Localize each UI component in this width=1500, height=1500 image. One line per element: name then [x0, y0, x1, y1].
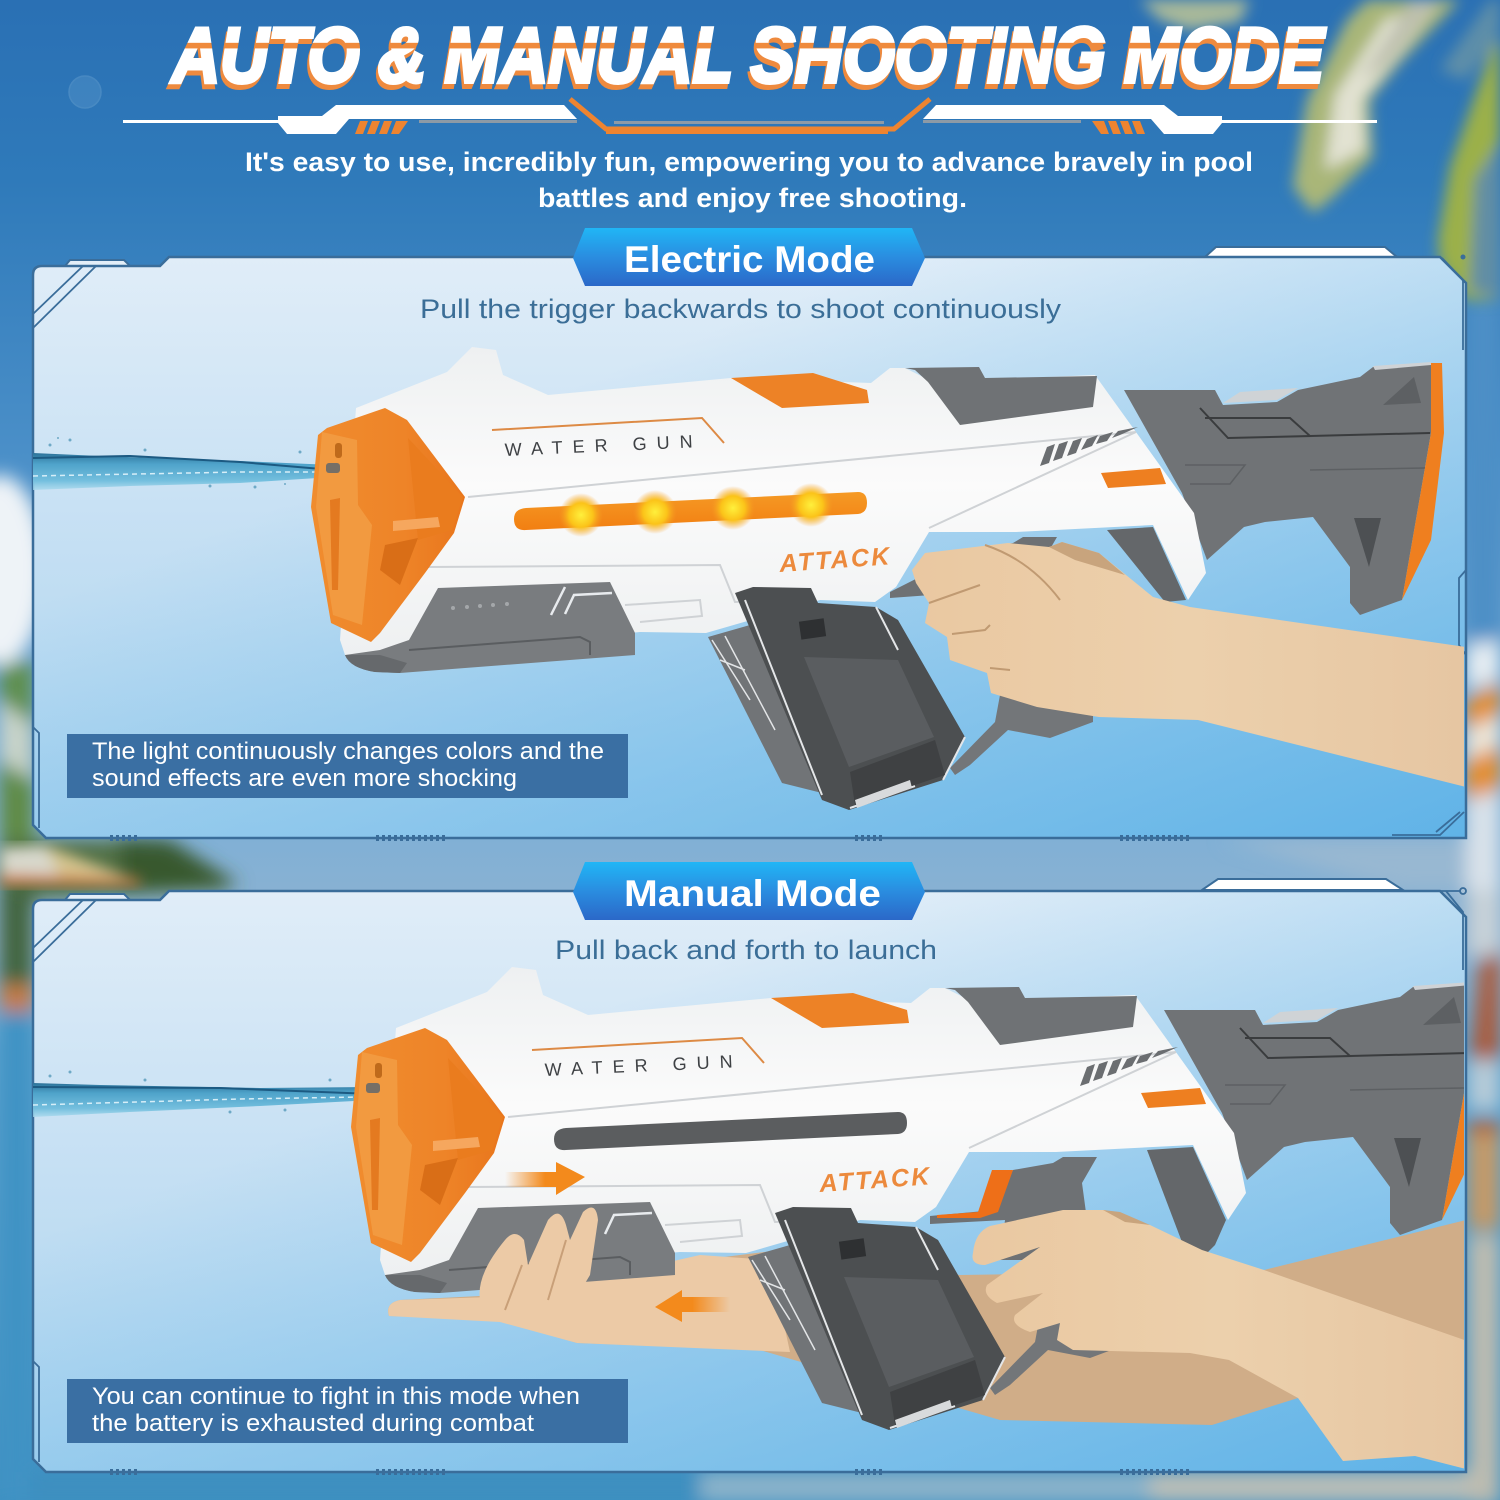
gun top rail — [905, 367, 1097, 425]
panel: electric mode — [33, 228, 1466, 838]
motion arrow: back — [655, 1290, 730, 1322]
gun body — [340, 347, 1206, 655]
caption: electric mode: The light continuously changes colors and the — [92, 738, 604, 765]
gun top cover — [771, 993, 909, 1028]
gun muzzle — [351, 1028, 505, 1262]
gun orange vent — [1101, 468, 1166, 488]
front hand fingers on slide — [480, 1208, 598, 1325]
gun orange vent — [1141, 1088, 1206, 1108]
gun label: water gun: WATER GUN — [504, 431, 693, 460]
rear forearm — [388, 1219, 1470, 1425]
subtitle: It's easy to use, incredibly fun, empowering you to advance bravely in pool — [245, 147, 1253, 177]
gun rear strut — [890, 527, 1186, 775]
gun vents — [1080, 1047, 1178, 1086]
gun label: attack: ATTACK — [777, 542, 892, 578]
heading badge: manual mode: Manual Mode — [624, 873, 881, 914]
caption: manual mode: You can continue to fight in this mode when — [92, 1383, 580, 1410]
gun body — [380, 967, 1246, 1275]
gun label: water gun — [492, 418, 724, 460]
gun stock — [1164, 982, 1484, 1235]
icon: water droplet bubble — [69, 76, 101, 108]
caption: manual mode: the battery is exhausted during combat — [92, 1410, 534, 1437]
subtitle — [245, 147, 1253, 213]
gun lower cover — [385, 1202, 675, 1293]
gun magazine — [708, 587, 965, 810]
title: AUTO & MANUAL SHOOTING MODE — [170, 11, 1326, 99]
beach umbrella — [0, 845, 140, 886]
gun stock — [1124, 362, 1444, 615]
heading badge: electric mode — [573, 228, 925, 286]
panel frame — [33, 247, 1466, 838]
gun label: water gun: WATER GUN — [544, 1051, 733, 1080]
palm fronds — [1140, 0, 1500, 300]
gun LED strip — [514, 483, 867, 537]
instruction text: Pull back and forth to launch — [555, 935, 937, 965]
caption: electric mode: sound effects are even more shocking — [92, 765, 517, 792]
water gun — [351, 967, 1484, 1430]
water jet — [33, 437, 333, 490]
title decorative divider — [123, 99, 1377, 134]
gun top cover — [731, 373, 869, 408]
subtitle: battles and enjoy free shooting. — [538, 183, 967, 213]
gun body seams — [428, 432, 1136, 622]
gun vents — [1040, 427, 1138, 466]
gun top rail — [945, 987, 1137, 1045]
gun muzzle — [311, 408, 465, 642]
motion arrow: forward — [505, 1162, 585, 1195]
heading badge: manual mode — [573, 862, 925, 920]
caption: electric mode — [67, 734, 628, 798]
gun label: water gun — [532, 1038, 764, 1080]
gun label: attack: ATTACK — [817, 1162, 932, 1198]
gun body seams — [468, 1052, 1176, 1242]
gripping hand and forearm — [972, 1210, 1470, 1470]
gun lower cover — [345, 582, 635, 673]
gun magazine — [748, 1207, 1005, 1430]
panel: manual mode — [33, 862, 1484, 1472]
caption: manual mode — [67, 1379, 628, 1443]
gun dark light slot — [554, 1112, 907, 1150]
heading badge: electric mode: Electric Mode — [624, 239, 875, 280]
water jet — [33, 1070, 373, 1117]
water gun — [311, 347, 1444, 810]
gun rear strut and grip — [930, 1147, 1226, 1395]
instruction text: Pull the trigger backwards to shoot continuously — [420, 294, 1062, 324]
panel frame — [33, 879, 1466, 1472]
shooting hand and forearm — [912, 542, 1466, 787]
